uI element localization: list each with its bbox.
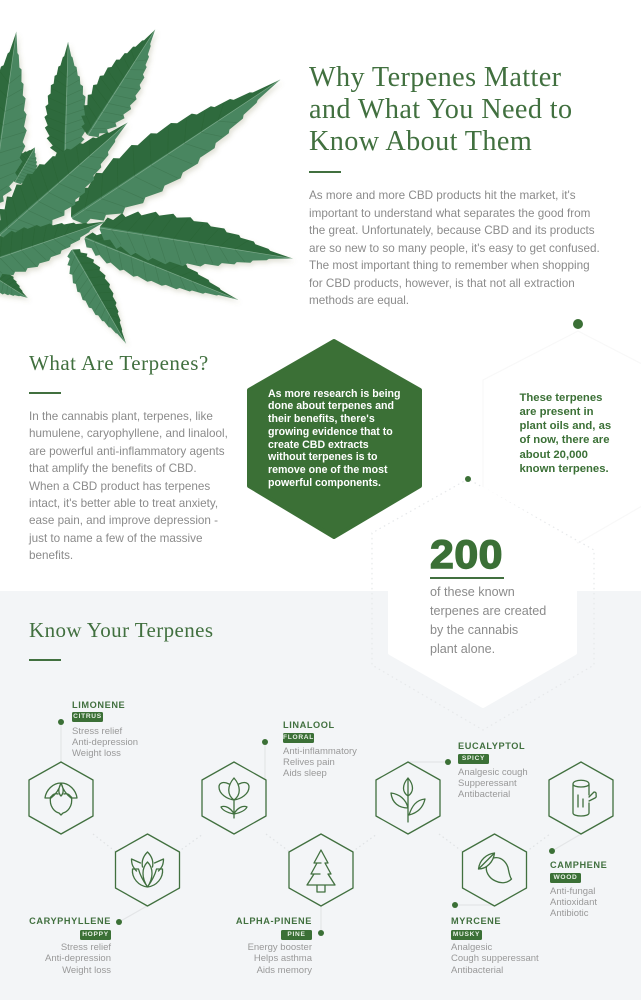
- green hexagon text: without terpenes is to: [268, 451, 377, 463]
- what are terpenes paragraph: intact, it's better able to treat anxiety,: [29, 497, 218, 510]
- title: Know About Them: [309, 126, 532, 157]
- terpene: myrcene: MYRCENE: [451, 916, 501, 926]
- green hexagon text: [268, 388, 400, 489]
- terpene: linalool: FLORAL: [283, 734, 314, 741]
- intro paragraph: As more and more CBD products hit the market, it's: [309, 189, 576, 202]
- terpene: limonene: Weight loss: [72, 748, 121, 759]
- intro paragraph: The most important thing to remember when shopping: [309, 259, 590, 272]
- green hexagon: [249, 341, 420, 537]
- cannabis leaf: [0, 18, 297, 352]
- terpene: eucalyptol: SPICY: [462, 755, 485, 762]
- terpene: linalool: Relives pain: [283, 757, 335, 768]
- outlined hexagon text: plant oils and, as: [520, 420, 611, 432]
- terpene: eucalyptol: Analgesic cough: [458, 766, 528, 778]
- white hexagon: 200: [390, 489, 575, 706]
- hexagon icon: linalool: [202, 762, 266, 834]
- intro paragraph: are so new to so many people, it's easy to get confused.: [309, 242, 600, 254]
- terpene: limonene: LIMONENE: [72, 700, 125, 710]
- green hexagon text: remove one of the most: [268, 464, 388, 476]
- terpene: myrcene: [451, 916, 539, 976]
- what are terpenes paragraph: When a CBD product has terpenes: [29, 480, 210, 493]
- outlined hexagon text: known terpenes.: [520, 463, 609, 475]
- title: [309, 62, 572, 157]
- what are terpenes paragraph: just to name a few of the massive: [29, 532, 202, 545]
- outlined hexagon text: These terpenes: [520, 392, 602, 404]
- terpene: myrcene: Antibacterial: [451, 965, 503, 976]
- terpene: camphene: Antibiotic: [550, 908, 589, 919]
- terpene: eucalyptol: Antibacterial: [458, 789, 510, 800]
- terpene: camphene: WOOD: [553, 874, 578, 881]
- heading rule: [29, 392, 61, 394]
- terpene: alpha-pinene: Energy booster: [248, 942, 312, 953]
- terpene: camphene: Antioxidant: [550, 897, 597, 908]
- hexagon icon: camphene: [549, 762, 613, 834]
- terpene: camphene: [550, 860, 607, 919]
- terpene: caryphyllene: [29, 916, 111, 976]
- intro paragraph: important to understand what separates the good from: [309, 206, 590, 220]
- stat: 200: 200: [430, 533, 503, 577]
- what are terpenes paragraph: [28, 410, 228, 562]
- terpene: limonene: CITRUS: [73, 713, 102, 720]
- dotted hexagon outline around 200: [372, 479, 594, 730]
- terpene: alpha-pinene: Helps asthma: [254, 953, 312, 964]
- intro paragraph: for CBD products, however, is that not all extraction: [309, 276, 575, 290]
- stat text: by the cannabis: [430, 622, 518, 636]
- terpene: eucalyptol: Supperessant: [458, 778, 517, 789]
- title: and What You Need to: [309, 94, 572, 125]
- terpene: alpha-pinene: ALPHA-PINENE: [236, 916, 312, 926]
- heading: what are terpenes: What Are Terpenes?: [29, 351, 209, 375]
- intro paragraph: methods are equal.: [309, 294, 409, 307]
- what are terpenes paragraph: are powerful anti-inflammatory agents: [29, 445, 225, 458]
- terpene: eucalyptol: EUCALYPTOL: [458, 741, 525, 751]
- green hexagon text: done about terpenes and: [268, 400, 394, 412]
- intro paragraph: the great. Unfortunately, because CBD and its products: [309, 224, 595, 237]
- terpene: caryphyllene: HOPPY: [82, 931, 109, 938]
- terpene: linalool: LINALOOL: [283, 720, 335, 730]
- dotted connectors between hexagons: [93, 834, 550, 852]
- terpene: linalool: Aids sleep: [283, 768, 327, 779]
- what are terpenes paragraph: that amplify the benefits of CBD.: [29, 462, 197, 475]
- hexagon icon: myrcene: [462, 834, 526, 906]
- terpene: alpha-pinene: PINE: [287, 931, 306, 938]
- what are terpenes paragraph: In the cannabis plant, terpenes, like: [29, 410, 213, 423]
- terpene: caryphyllene: Stress relief: [61, 942, 111, 953]
- stat text: of these known: [430, 584, 515, 598]
- what are terpenes paragraph: ease pain, and improve depression -: [29, 514, 218, 527]
- leader dots: [58, 719, 555, 936]
- dot: dotted hexagon start: [465, 476, 471, 482]
- green hexagon text: As more research is being: [268, 388, 400, 400]
- terpene: caryphyllene: Weight loss: [62, 965, 111, 976]
- intro paragraph: [309, 189, 600, 307]
- green hexagon text: powerful components.: [268, 477, 381, 489]
- title rule: [309, 171, 341, 172]
- stat rule: [430, 577, 504, 578]
- heading: know your terpenes: Know Your Terpenes: [29, 618, 213, 642]
- terpene: linalool: [283, 720, 357, 779]
- green hexagon text: growing evidence that to: [268, 426, 393, 438]
- stat text: [430, 584, 546, 656]
- grey lower section: [0, 591, 641, 1000]
- white hexagon outline: 20,000 terpenes: [483, 331, 641, 543]
- green hexagon text: their benefits, there's: [268, 413, 375, 425]
- what are terpenes paragraph: benefits.: [29, 549, 73, 562]
- outlined hexagon text: about 20,000: [520, 449, 588, 461]
- green hexagon text: create CBD extracts: [268, 438, 369, 450]
- terpene: camphene: Anti-fungal: [550, 886, 595, 896]
- terpene: caryphyllene: Anti-depression: [45, 953, 111, 964]
- outlined hexagon text: are present in: [520, 406, 594, 418]
- title: Why Terpenes Matter: [309, 62, 561, 93]
- stat text: plant alone.: [430, 642, 495, 656]
- terpene: alpha-pinene: Aids memory: [257, 965, 312, 976]
- what are terpenes paragraph: humulene, caryophyllene, and linalool,: [29, 427, 228, 440]
- terpene: eucalyptol: [458, 741, 528, 800]
- terpene: camphene: CAMPHENE: [550, 860, 607, 870]
- hexagon icon: limonene: [29, 762, 93, 834]
- leader lines: [61, 722, 581, 933]
- outlined hexagon text: of now, there are: [520, 434, 609, 446]
- terpene: myrcene: Cough supperessant: [451, 953, 539, 964]
- stat text: terpenes are created: [430, 604, 546, 618]
- terpene: myrcene: Analgesic: [451, 942, 492, 953]
- terpene: limonene: [72, 700, 138, 759]
- heading rule: [29, 659, 61, 660]
- terpene: linalool: Anti-inflammatory: [283, 746, 357, 756]
- terpene: caryphyllene: CARYPHYLLENE: [29, 916, 111, 926]
- hexagon icon: caryphyllene: [116, 834, 180, 906]
- hexagon icon: eucalyptol: [376, 762, 440, 834]
- terpene: limonene: Stress relief: [72, 726, 122, 736]
- outlined hexagon text: [520, 392, 611, 475]
- terpene: limonene: Anti-depression: [72, 737, 138, 748]
- dot: top of outlined hexagon: [573, 319, 583, 329]
- terpene: alpha-pinene: [236, 916, 312, 976]
- terpene: myrcene: MUSKY: [453, 931, 480, 938]
- hexagon icon: alpha-pinene: [289, 834, 353, 906]
